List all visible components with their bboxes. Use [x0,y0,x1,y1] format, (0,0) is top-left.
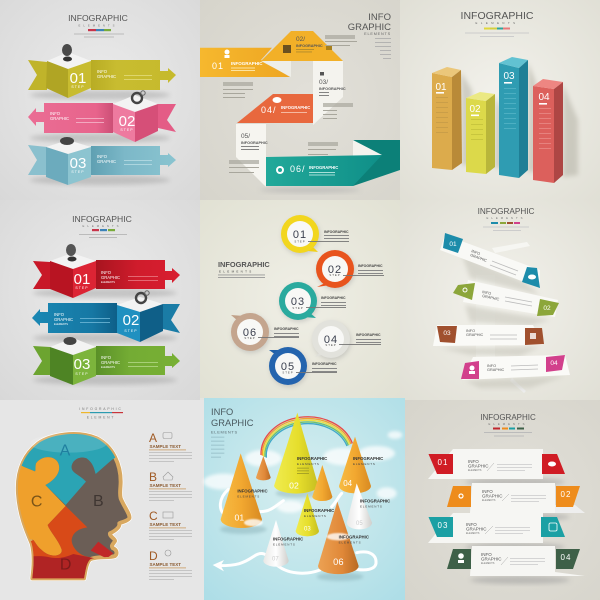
ribbon step 02: INFO [54,312,65,317]
ribbon step 01: GRAPHIC [97,74,116,79]
banner 02: INFO [482,489,493,494]
icon: gear [463,288,467,292]
ribbon segment 03 white [313,61,346,125]
banner 04: GRAPHIC [481,556,502,562]
ribbon step 03: 03 [74,356,90,373]
legend A sample text: SAMPLE TEXT [150,444,181,449]
ribbon step 03: INFO [97,154,108,159]
heading: info graphic elements: ELEMENTS [211,429,238,434]
legend A sample text [149,431,192,462]
ribbon step 01: 01 [70,70,86,87]
heading: info graphic elements: GRAPHIC [211,418,254,428]
banner 01: GRAPHIC [468,464,489,468]
legend B sample text: B [149,470,157,484]
heading: infographic elements [480,413,536,436]
cone 06 orange-brown: 06 [333,557,344,567]
cone 04 orange: ELEMENTS [353,462,376,466]
ribbon segment 06 teal [260,140,400,193]
banner 02: 02 [543,305,551,312]
icon: square badge [283,45,291,53]
ribbon segment 01 orange: 01 [212,61,224,71]
heading: infographic elements: INFOGRAPHIC [478,207,535,216]
bar 03: 03 [503,71,515,82]
banner 03: INFO [466,522,477,527]
heading: infographic element: ELEMENT [87,416,115,420]
heading: info graphic elements: ELEMENTS [364,32,391,36]
panel: three-step cube ribbons, pastel [28,13,176,185]
banner 03: ELEMENTS [466,532,480,535]
heading: infographic elements: INFOGRAPHIC [461,10,534,22]
step 03 circle: STEP [292,306,304,310]
legend D sample text [149,549,192,580]
cone 02 yellow: 02 [289,480,299,490]
ribbon step 02: 02 [119,113,135,130]
cone 04 orange: 04 [343,479,353,488]
icon: gears [136,291,149,303]
ribbon segment 04 red: 04/ [261,105,277,115]
cone 01 orange [220,453,268,534]
step 06 circle: INFOGRAPHIC [274,327,299,331]
ribbon step 03: 03 [70,155,86,172]
ribbon step 03: INFO [101,355,112,360]
heading: infographic elements: ELEMENTS [219,270,254,274]
banner 04: GRAPHIC [487,368,505,372]
banner 02: 02 [561,490,571,499]
head puzzle illustration: C [31,494,42,511]
icon: person [469,366,475,374]
ribbon segment 05 white [236,124,268,187]
cone 05 white: 05 [356,521,363,527]
icon: envelope [530,333,536,339]
legend C sample text [149,509,192,540]
banner 03: GRAPHIC [466,333,484,337]
bar 02 [466,92,495,174]
bar shadows [461,62,578,177]
heading: infographic elements: ELEMENTS [488,422,528,426]
banner 02 [453,280,559,317]
panel: cones and rainbow [203,407,402,581]
heading: info graphic elements: INFO [368,12,391,23]
step 04 circle: 04 [324,334,338,346]
step 01 circle [281,215,349,255]
banner 04: 04 [550,360,558,367]
heading: infographic elements: ELEMENTS [475,21,519,25]
cone 03 yellow: 03 [304,527,311,533]
banner 03 [433,325,544,346]
heading: infographic elements: INFOGRAPHIC [68,13,128,23]
heading: infographic elements: ELEMENTS [486,216,526,220]
banner 03: 03 [438,521,448,530]
ribbon step 02: INFO [50,111,61,116]
clouds [203,431,402,513]
legend D sample text: SAMPLE TEXT [150,562,181,567]
rainbow [261,417,352,458]
banner 01 [440,233,540,288]
cone 05 white [347,483,390,529]
signpost pole [440,242,565,393]
step 06 circle: 06 [243,327,257,339]
ribbon segment 05 white: INFOGRAPHIC [241,141,268,145]
cone 06 orange-brown [317,502,369,581]
ribbon segment 06 teal: INFOGRAPHIC [309,165,338,170]
legend B sample text [149,470,192,501]
cone 07 white: INFOGRAPHIC [273,536,303,541]
icon: person [66,244,76,262]
cone 04 orange: INFOGRAPHIC [353,456,383,461]
banner 04: INFO [487,364,496,368]
banner 01 [428,449,565,486]
head puzzle illustration: A [60,443,71,460]
icon: bubble [528,274,536,280]
bar 03 [499,57,528,178]
legend A sample text: A [149,431,157,445]
banner 04: ELEMENTS [481,562,495,565]
step 01 circle: INFOGRAPHIC [324,230,349,234]
heading: infographic elements [72,214,132,238]
icon: badge [549,523,557,531]
puzzle piece C orange [18,457,66,556]
legend C sample text: C [149,509,158,523]
heading: info graphic elements [211,407,254,458]
ribbon segment 02 orange: 02/ [296,36,305,43]
heading: infographic elements: INFOGRAPHIC [218,260,270,269]
ribbon segment 05 white: 05/ [241,133,250,140]
banner 04: INFO [481,552,492,557]
panel: circular steps [218,215,384,387]
step 05 circle [269,347,337,387]
banner 03: GRAPHIC [466,526,487,532]
heading: info graphic elements: INFO [211,407,233,417]
banner 01: ELEMENTS [468,469,482,472]
ribbon segment 01 orange: INFOGRAPHIC [231,61,263,66]
banner 01: 01 [449,241,457,248]
ribbon segment 02 orange: INFOGRAPHIC [296,44,323,48]
ribbon step 01 [33,244,180,298]
step 02 circle: STEP [329,273,341,277]
ribbon step 02: STEP [120,128,134,132]
puzzle piece D red [30,506,94,578]
head puzzle illustration: D [60,556,71,573]
step 05 circle: 05 [281,361,295,373]
step 06 circle [231,313,299,353]
cone 05 white: ELEMENTS [360,504,383,508]
ribbon segment 04 red: INFOGRAPHIC [281,105,310,110]
ribbon step 02: GRAPHIC [54,317,73,322]
banner 01: INFO [468,459,479,464]
ribbon step 01: INFO [101,270,112,275]
heading: infographic elements [218,260,270,278]
step 02 circle: INFOGRAPHIC [358,264,383,268]
legend C sample text: SAMPLE TEXT [150,522,181,527]
side captions [223,35,357,173]
bar 01: 01 [435,82,447,93]
cone 07 white: ELEMENTS [273,542,296,546]
heading: infographic element [79,407,123,420]
icon: gear [277,167,283,173]
ribbon step 01: INFO [97,69,108,74]
icon: cloud [272,97,282,103]
ribbon step 01: 01 [74,271,90,288]
cone 02 yellow: INFOGRAPHIC [297,456,327,461]
cone 07 white [263,520,303,567]
banner 04 [447,546,585,584]
heading: info graphic elements: GRAPHIC [348,22,391,33]
bar 01 [432,67,462,170]
heading: infographic elements: ELEMENTS [82,224,122,228]
banner 02 [447,483,585,521]
ribbon step 03: ELEMENTS [101,365,115,369]
ribbon step 03: STEP [75,372,89,376]
step 05 circle: INFOGRAPHIC [312,362,337,366]
bar 04 [533,79,563,183]
ribbon step 03 [28,137,176,185]
step 05 circle: STEP [282,370,294,374]
step 03 circle: 03 [291,296,305,308]
cone 01 orange: INFOGRAPHIC [237,488,268,493]
cone 01 orange: ELEMENTS [237,494,260,498]
icon: cloud [548,462,556,466]
icon: speech bubbles [60,137,74,145]
step 01 circle: 01 [293,229,307,241]
heading: infographic elements: INFOGRAPHIC [480,413,536,422]
icon: person [62,44,72,62]
step 04 circle: INFOGRAPHIC [356,333,381,337]
head puzzle illustration [10,430,130,580]
step 02 circle [316,250,384,290]
cone 03 yellow: ELEMENTS [304,514,327,518]
ribbon step 02: STEP [124,329,138,333]
icon: person [224,50,230,58]
cone 03 yellow [296,493,334,536]
heading: infographic elements [68,13,128,38]
cone 01 orange: 01 [235,513,244,523]
step 01 circle: STEP [294,240,306,244]
cone 06 orange-brown: ELEMENTS [339,541,361,545]
cone 02 yellow: ELEMENTS [297,462,320,466]
step 06 circle: STEP [244,336,256,340]
cone 04 orange [339,437,383,493]
ribbon step 02: 02 [123,312,139,329]
step 04 circle [312,320,381,360]
step 03 circle: INFOGRAPHIC [321,296,346,300]
bar 04: 04 [538,92,550,103]
cone small orange [312,465,332,501]
cone 07 white: 07 [272,557,279,563]
ribbon segment 04 red [237,94,313,123]
legend B sample text: SAMPLE TEXT [150,483,181,488]
ribbon segment 03 white: INFOGRAPHIC [319,87,346,91]
banner 03: 03 [443,330,451,337]
panel: tilted signpost banners [433,207,570,393]
icon: gears [132,91,145,103]
banner 04 [461,355,570,380]
panel: three-step cube ribbons, saturated [32,214,180,385]
banner 04: 04 [561,553,571,562]
panel: stacked paper banners [428,413,585,584]
bar 02: 02 [469,104,481,115]
banner 02: GRAPHIC [482,494,503,498]
ribbon step 01: STEP [71,85,85,89]
step 04 circle: STEP [325,343,337,347]
ribbon step 01 [28,44,176,100]
ribbon segment 02 orange [261,31,343,61]
banner 03 [428,513,565,551]
ribbon step 02 [32,291,180,343]
cone small brown [256,456,271,480]
banner 03: INFO [466,329,475,333]
step 02 circle: 02 [328,264,342,276]
ribbon segment 03 white: 03/ [319,79,328,86]
ribbon segment 01 orange [200,48,291,77]
banner 02: ELEMENTS [482,499,496,502]
ribbon step 01: ELEMENTS [101,280,115,284]
ribbon step 03: GRAPHIC [97,159,116,164]
ribbon step 02: ELEMENTS [54,322,68,326]
legend D sample text: D [149,549,158,563]
ribbon step 03: STEP [71,170,85,174]
icon: speech bubbles [64,337,76,345]
heading: info graphic elements [348,12,391,59]
icon: person [458,553,464,563]
heading: infographic elements [461,10,534,37]
puzzle piece A teal [22,434,116,505]
cone 06 orange-brown: INFOGRAPHIC [339,535,369,540]
step 03 circle [279,282,346,322]
cone 05 white: INFOGRAPHIC [360,498,390,503]
banner 02: GRAPHIC [482,294,500,302]
banner 02: INFO [482,290,492,296]
panel: origami S ribbon [200,12,400,193]
icon: gear [459,494,463,498]
heading: infographic elements: INFOGRAPHIC [72,214,132,224]
heading: infographic element: INFOGRAPHIC [79,407,123,411]
ribbon step 03 [33,337,180,385]
cone 02 yellow [274,413,327,498]
cone 03 yellow: INFOGRAPHIC [304,508,334,513]
white route arrow [213,489,376,573]
ribbon segment 06 teal: 06/ [290,164,306,174]
ribbon step 02 [28,91,176,143]
heading: infographic elements [478,207,535,231]
panel: 3D bar chart [432,10,578,183]
ribbon step 02: GRAPHIC [50,116,69,121]
head puzzle illustration: B [93,493,104,510]
heading: infographic elements: ELEMENTS [78,24,118,28]
banner 01: 01 [438,458,448,467]
banner 01: INFO [471,249,481,256]
ribbon step 03: GRAPHIC [101,360,120,365]
ribbon step 01: GRAPHIC [101,275,120,280]
panel: puzzle head [10,407,192,580]
banner 01: GRAPHIC [470,253,488,263]
ribbon step 01: STEP [75,286,89,290]
